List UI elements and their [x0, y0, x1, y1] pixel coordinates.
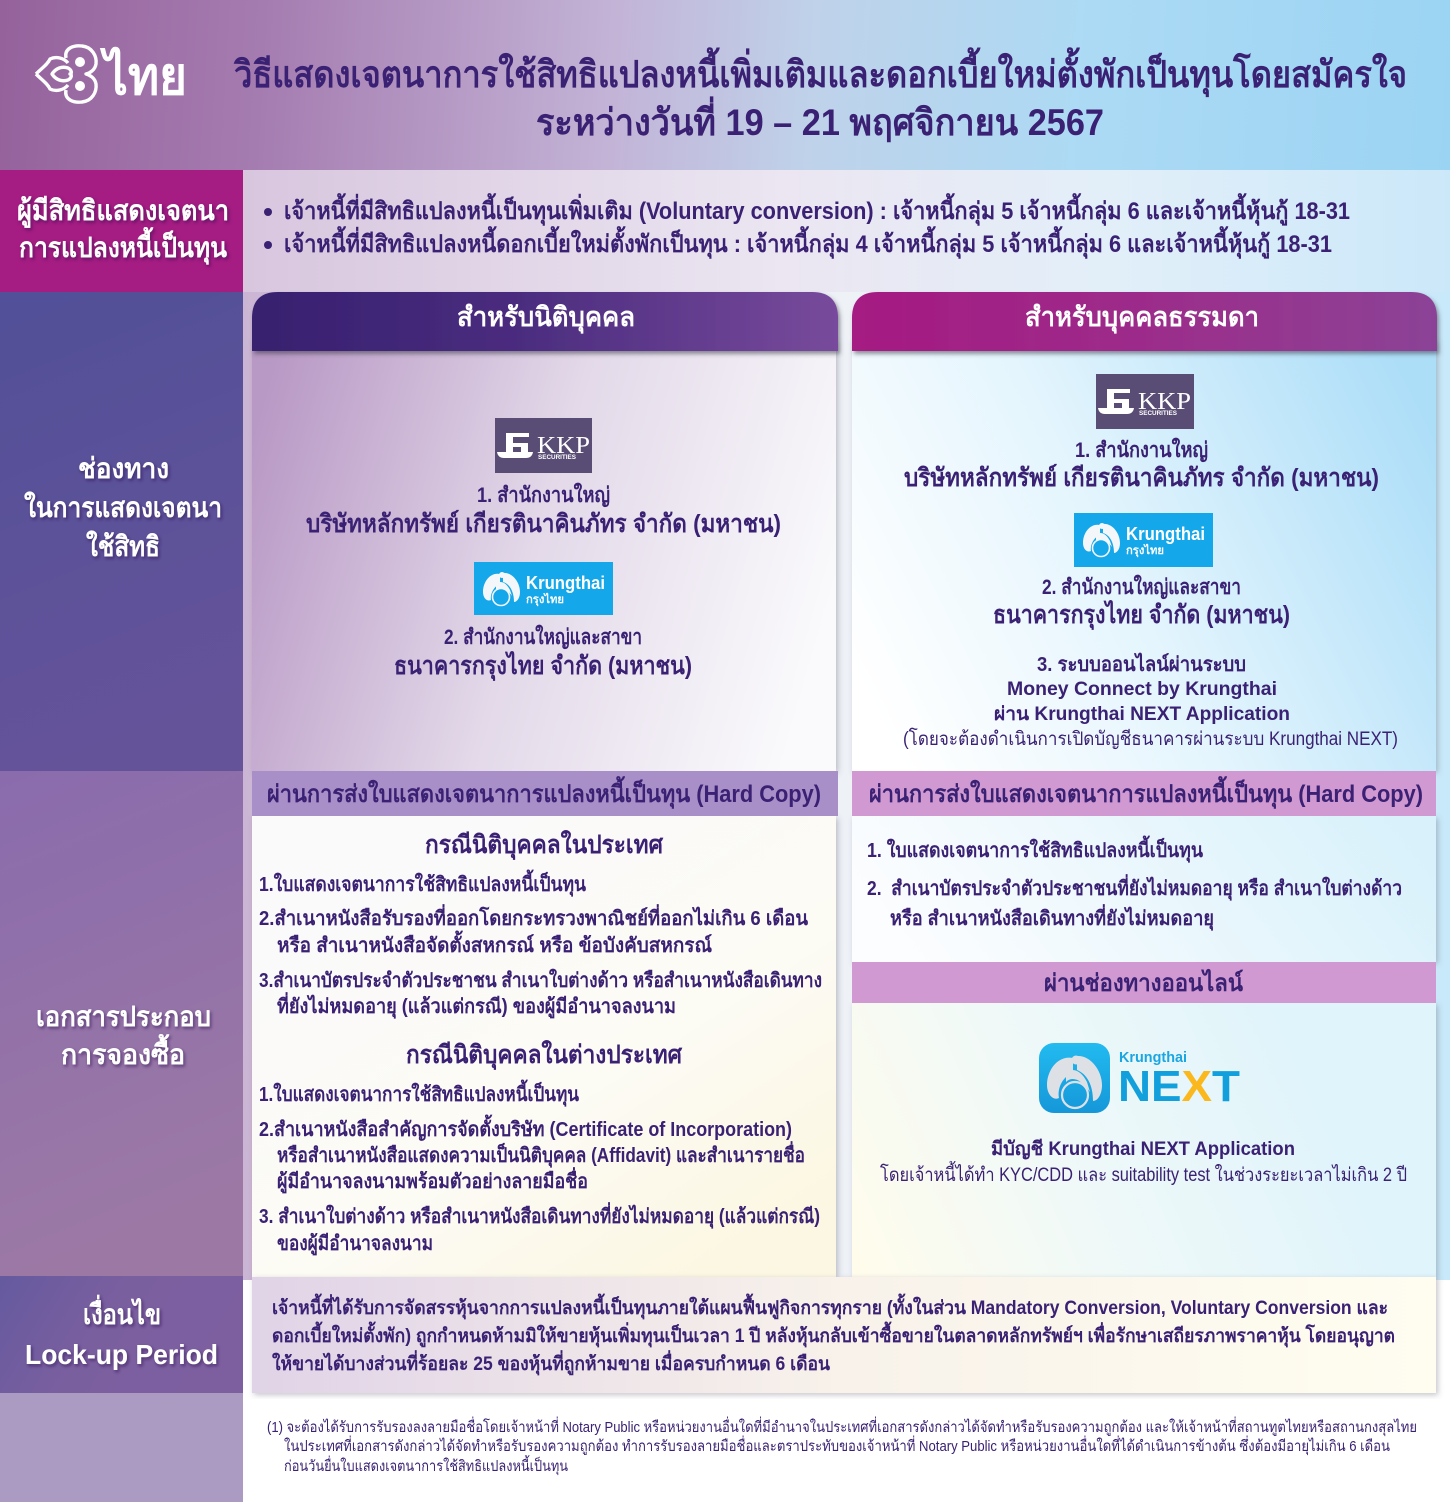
eligibility list [264, 192, 1350, 260]
domestic juristic list: 2.สำเนาหนังสือรับรองที่ออกโดยกระทรวงพาณิชย์ที่ออกไม่เกิน 6 เดือน [259, 903, 808, 930]
title: ระหว่างวันที่ 19 – 21 พฤศจิกายน 2567 [536, 96, 1104, 143]
panel: juristic documents [252, 771, 838, 1277]
channel 1 text: 1. สำนักงานใหญ่ [477, 482, 610, 508]
hard copy list [867, 835, 1402, 931]
heading: individual [852, 292, 1437, 351]
subheading: online: ผ่านช่องทางออนไลน์ [1044, 968, 1244, 997]
heading: juristic [252, 292, 838, 351]
domestic juristic list: กรณีนิติบุคคลในประเทศ [425, 829, 664, 861]
sidebar: documents label: การจองซื้อ [61, 1033, 185, 1070]
logo: Krungthai NEXT app: Krungthai [1119, 1049, 1187, 1066]
online requirement text [880, 1138, 1407, 1186]
sidebar: channels label [0, 292, 243, 771]
hard copy list: 1. ใบแสดงเจตนาการใช้สิทธิแปลงหนี้เป็นทุน [867, 835, 1203, 863]
icon: app tile [1039, 1043, 1110, 1113]
channel 3 text: 3. ระบบออนไลน์ผ่านระบบ [1037, 652, 1246, 676]
sidebar: footer block [0, 1393, 243, 1502]
sidebar: lock-up label: เงื่อนไข [83, 1294, 161, 1330]
domestic juristic list: 3.สำเนาบัตรประจำตัวประชาชน สำเนาใบต่างด้าว หรือสำเนาหนังสือเดินทาง [259, 968, 822, 992]
online requirement text: มีบัญชี Krungthai NEXT Application [991, 1138, 1295, 1160]
channel 1 text: 1. สำนักงานใหญ่ [1075, 437, 1208, 463]
foreign juristic list: 3. สำเนาใบต่างด้าว หรือสำเนาหนังสือเดินทางที่ยังไม่หมดอายุ (แล้วแต่กรณี) [259, 1201, 820, 1229]
channel 1 text [306, 482, 781, 538]
foreign juristic list: กรณีนิติบุคคลในต่างประเทศ [406, 1039, 683, 1071]
domestic juristic list: 1.ใบแสดงเจตนาการใช้สิทธิแปลงหนี้เป็นทุน [259, 869, 586, 897]
channel 2 text: ธนาคารกรุงไทย จำกัด (มหาชน) [993, 599, 1290, 631]
panel: eligibility [243, 170, 1450, 292]
domestic juristic list: หรือ สำเนาหนังสือจัดตั้งสหกรณ์ หรือ ข้อบังคับสหกรณ์ [277, 930, 712, 957]
sidebar: eligibility label: ผู้มีสิทธิแสดงเจตนา [17, 195, 229, 228]
subheading: hard copy [852, 771, 1436, 816]
channel 2 text: ธนาคารกรุงไทย จำกัด (มหาชน) [394, 650, 692, 682]
hard copy list: หรือ สำเนาหนังสือเดินทางที่ยังไม่หมดอายุ [890, 903, 1214, 931]
channel 3 text [903, 652, 1398, 750]
foreign juristic list: ของผู้มีอำนาจลงนาม [277, 1232, 433, 1257]
panel: individual documents [852, 771, 1436, 1277]
foreign juristic list: หรือสำเนาหนังสือแสดงความเป็นนิติบุคคล (Affidavit) และสำเนารายชื่อ [277, 1140, 805, 1168]
subheading: hard copy [252, 771, 838, 816]
foreign juristic list: 2.สำเนาหนังสือสำคัญการจัดตั้งบริษัท (Certificate of Incorporation) [259, 1114, 792, 1141]
logo: Krungthai [1074, 513, 1213, 567]
channel 1 text: บริษัทหลักทรัพย์ เกียรตินาคินภัทร จำกัด (มหาชน) [306, 509, 781, 538]
title [233, 47, 1407, 143]
channel 3 text: Money Connect by Krungthai [1007, 679, 1277, 700]
airline logo [36, 46, 187, 106]
logo: Krungthai: Krungthai [526, 573, 605, 593]
icon: garuda bird [1083, 523, 1120, 556]
foreign juristic list: ผู้มีอำนาจลงนามพร้อมตัวอย่างลายมือชื่อ [277, 1166, 588, 1195]
sidebar: channels label: ช่องทาง [78, 453, 169, 484]
panel: lock-up period: ให้ขายได้บางส่วนที่ร้อยละ 25 ของหุ้นที่ถูกห้ามขาย เมื่อครบกำหนด 6 เดือน [272, 1350, 830, 1376]
logo: KKP securities: KKP [1138, 389, 1191, 415]
channel 1 text: บริษัทหลักทรัพย์ เกียรตินาคินภัทร จำกัด (มหาชน) [904, 463, 1379, 492]
panel: lock-up period: เจ้าหนี้ที่ได้รับการจัดสรรหุ้นจากการแปลงหนี้เป็นทุนภายใต้แผนฟื้นฟูกิจการทุกราย (ทั้งในส่วน Mandatory Conversion, Voluntary Conversion และ [272, 1293, 1388, 1320]
sidebar: documents label: เอกสารประกอบ [36, 1001, 211, 1032]
channel 2 text [993, 574, 1290, 631]
channel 2 text: 2. สำนักงานใหญ่และสาขา [444, 624, 642, 650]
logo: Krungthai: Krungthai [1126, 524, 1205, 544]
header band [0, 0, 1450, 170]
channel 3 text: ผ่าน Krungthai NEXT Application [994, 704, 1290, 725]
subheading: hard copy: ผ่านการส่งใบแสดงเจตนาการแปลงหนี้เป็นทุน (Hard Copy) [267, 775, 821, 810]
channel 2 text: 2. สำนักงานใหญ่และสาขา [1042, 574, 1241, 600]
icon: logo flourish [36, 46, 96, 102]
logo: Krungthai: กรุงไทย [526, 592, 564, 607]
domestic juristic list [259, 829, 822, 1020]
channel 1 text [904, 437, 1379, 492]
panel: lock-up period [252, 1277, 1436, 1393]
logo: KKP securities [495, 418, 592, 473]
heading: individual: สำหรับบุคคลธรรมดา [1025, 302, 1259, 334]
channel 3 text: (โดยจะต้องดำเนินการเปิดบัญชีธนาคารผ่านระบบ Krungthai NEXT) [903, 727, 1398, 750]
sidebar: eligibility label: การแปลงหนี้เป็นทุน [19, 226, 227, 265]
domestic juristic list: ที่ยังไม่หมดอายุ (แล้วแต่กรณี) ของผู้มีอำนาจลงนาม [277, 991, 676, 1020]
sidebar: channels label: ในการแสดงเจตนา [24, 491, 222, 523]
logo: KKP securities: SECURITIES [538, 455, 576, 461]
eligibility list: เจ้าหนี้ที่มีสิทธิแปลงหนี้เป็นทุนเพิ่มเติม (Voluntary conversion) : เจ้าหนี้กลุ่ม 5 เจ้าหนี้กลุ่ม 6 และเจ้าหนี้หุ้นกู้ 18-31 [284, 192, 1350, 227]
footnote: ก่อนวันยื่นใบแสดงเจตนาการใช้สิทธิแปลงหนี้เป็นทุน [284, 1455, 568, 1476]
panel: juristic person channels [252, 292, 838, 771]
logo wordmark: ไทย [99, 46, 187, 106]
logo: KKP securities [1096, 374, 1194, 429]
panel: individual channels [852, 292, 1437, 771]
foreign juristic list [259, 1039, 820, 1257]
heading: juristic: สำหรับนิติบุคคล [457, 302, 635, 334]
NEXT wordmark: NEXT [1118, 1062, 1240, 1111]
logo: KKP securities: KKP [537, 433, 590, 459]
channel 2 text [394, 624, 692, 682]
footnote [267, 1416, 1417, 1476]
subheading: online [852, 962, 1436, 1003]
eligibility list: เจ้าหนี้ที่มีสิทธิแปลงหนี้ดอกเบี้ยใหม่ตั้งพักเป็นทุน : เจ้าหนี้กลุ่ม 4 เจ้าหนี้กลุ่ม 5 เจ้าหนี้กลุ่ม 6 และเจ้าหนี้หุ้นกู้ 18-31 [284, 225, 1332, 260]
icon: garuda bird [483, 572, 520, 606]
logo: KKP securities: SECURITIES [1139, 411, 1177, 417]
sidebar: lock-up label: Lock-up Period [25, 1339, 218, 1370]
logo: Krungthai NEXT app [1039, 1043, 1240, 1113]
sidebar: channels label: ใช้สิทธิ [86, 530, 160, 562]
content background [243, 292, 1450, 1280]
sidebar: documents label [0, 771, 243, 1276]
sidebar: eligibility label [0, 170, 243, 292]
logo: Krungthai: กรุงไทย [1126, 543, 1164, 558]
sidebar: lock-up label [0, 1276, 243, 1393]
foreign juristic list: 1.ใบแสดงเจตนาการใช้สิทธิแปลงหนี้เป็นทุน [259, 1079, 579, 1107]
logo: Krungthai [474, 562, 613, 615]
